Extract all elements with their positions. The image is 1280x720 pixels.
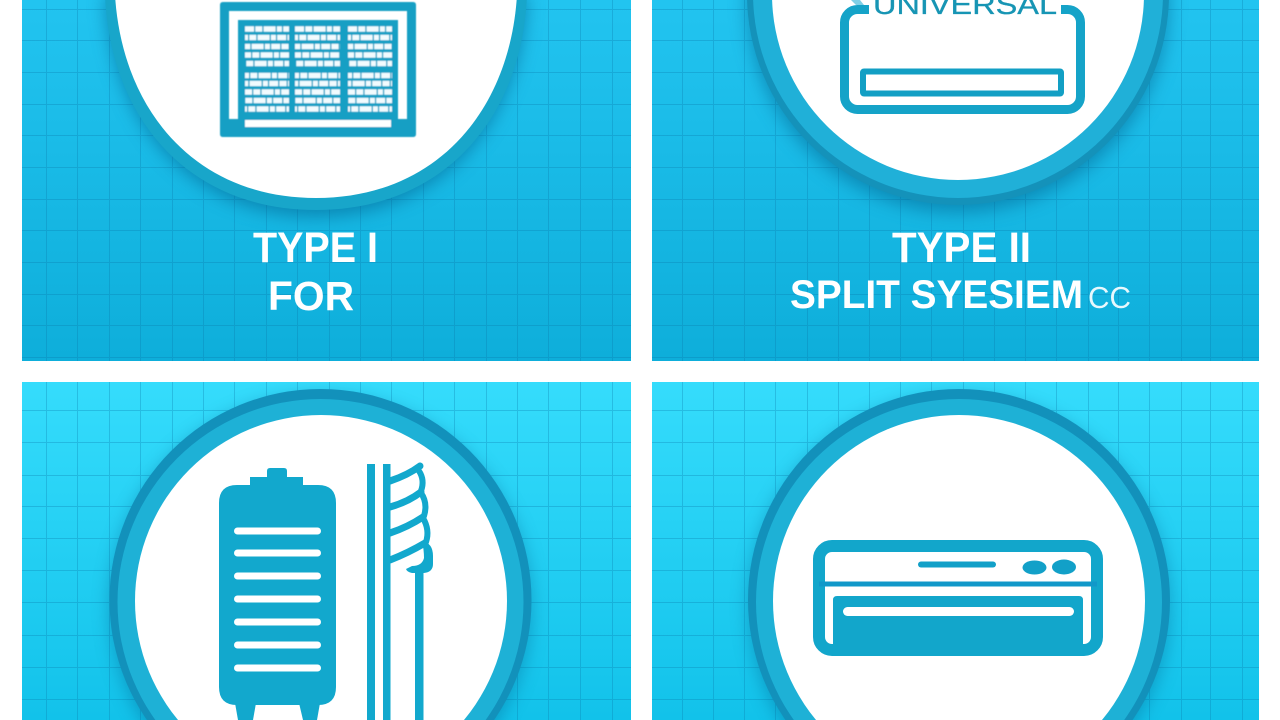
panel: lower right — [652, 382, 1259, 720]
icon: coil pipes — [367, 464, 433, 720]
icon: window unit with brick grille — [220, 2, 416, 137]
heading: FOR: FOR — [268, 273, 354, 319]
icon: wall air conditioner — [819, 546, 1097, 652]
heading: TYPE I: TYPE I — [253, 224, 378, 272]
badge: Type I circle — [105, 0, 527, 210]
badge: lower right circle — [748, 389, 1170, 720]
badge: Type II circle — [747, 0, 1169, 205]
label: CC: CC — [1088, 280, 1131, 315]
panel: Type I — [22, 0, 631, 361]
panel: Type II — [652, 0, 1259, 361]
heading: SPLIT SYSTEM: SPLIT SYESIEM — [790, 273, 1083, 317]
icon: split system indoor unit — [844, 0, 1080, 110]
panel: lower left — [22, 382, 631, 720]
icon: radiator tank — [219, 468, 336, 720]
badge: lower left circle — [110, 389, 532, 720]
heading: TYPE II: TYPE II — [892, 224, 1031, 272]
